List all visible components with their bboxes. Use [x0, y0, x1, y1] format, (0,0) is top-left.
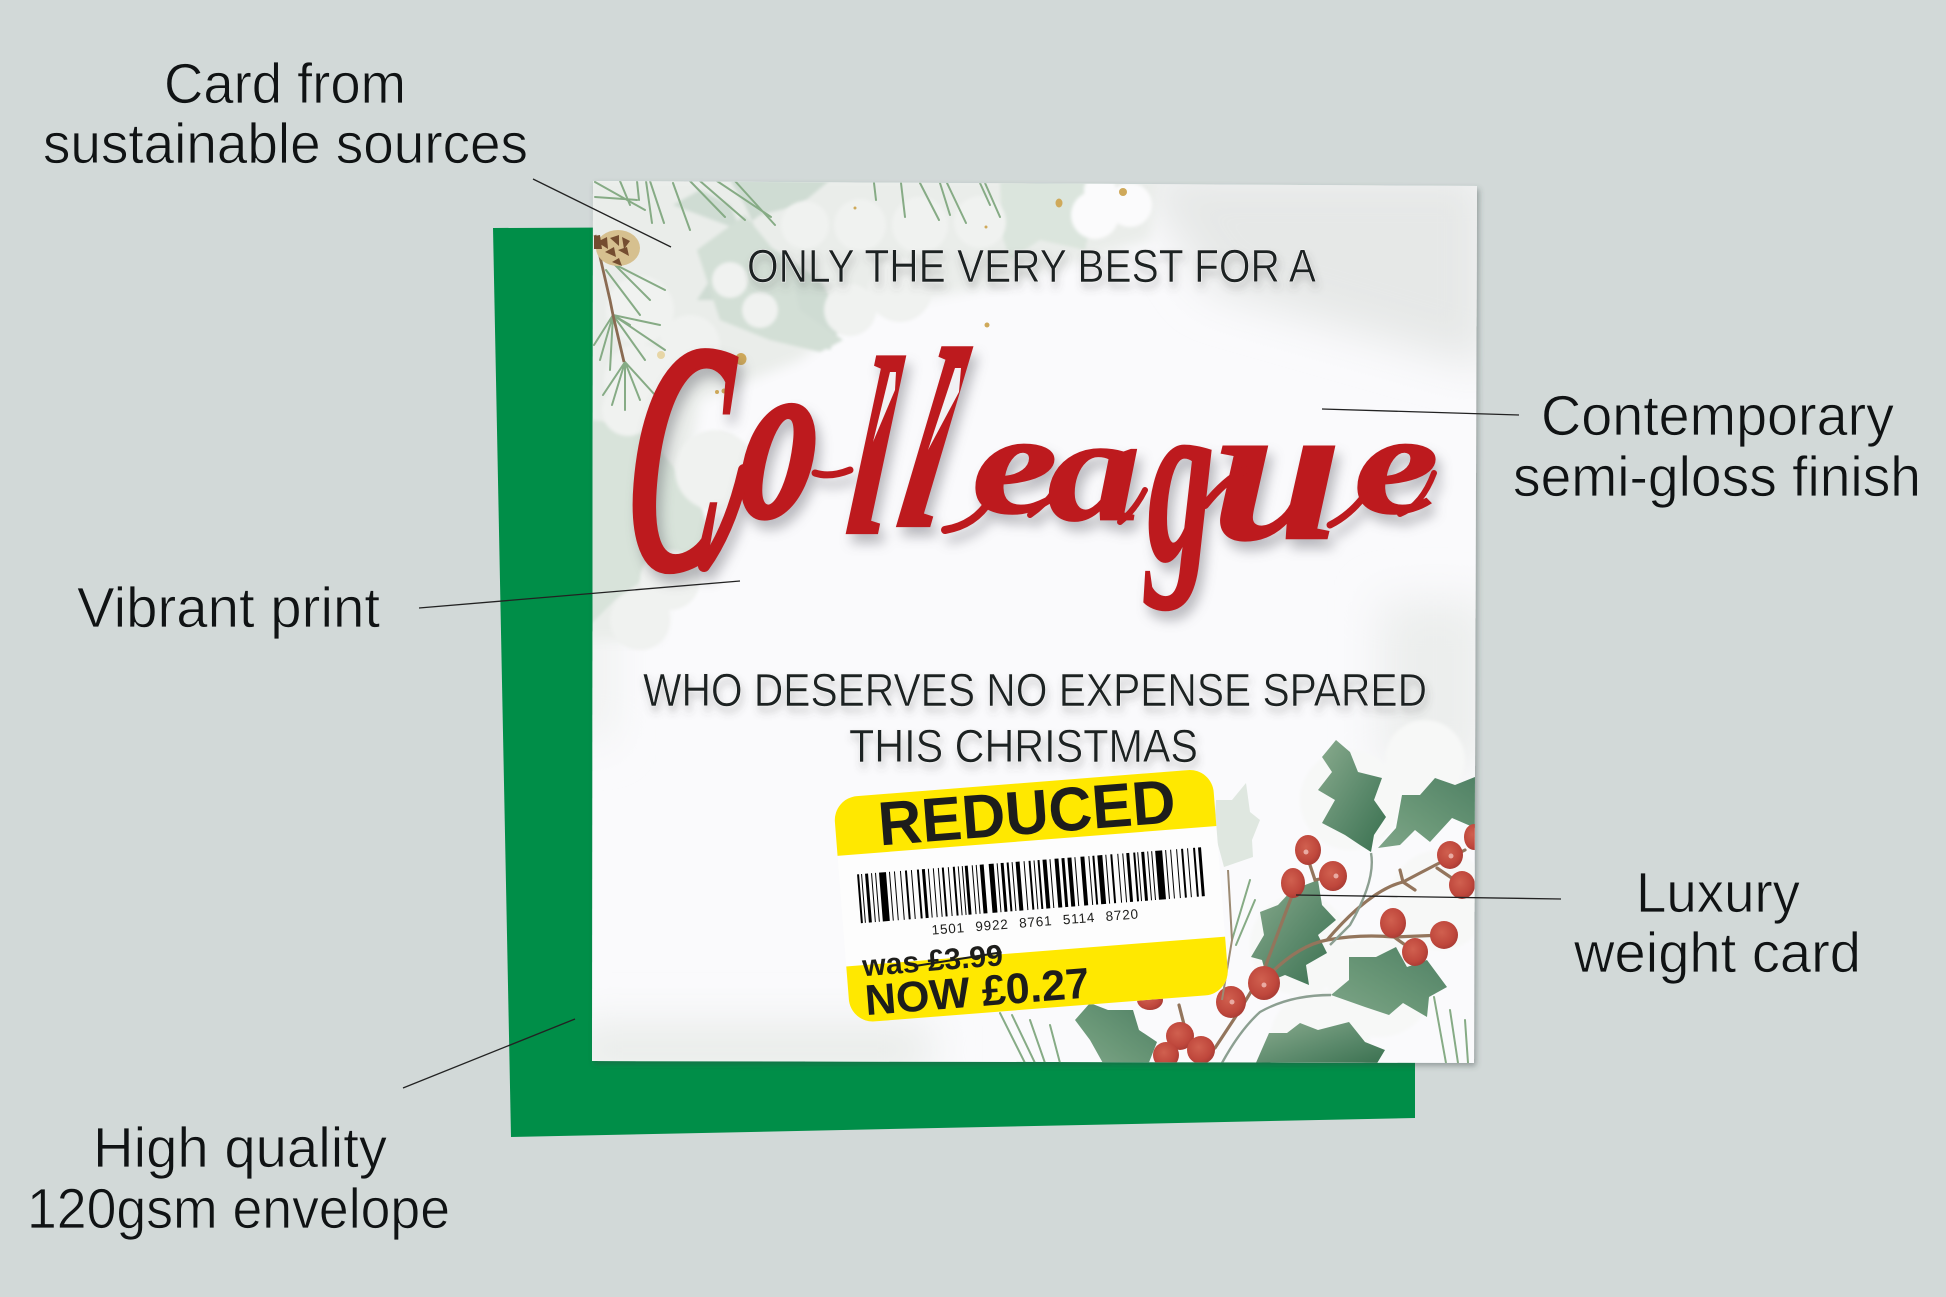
card heading line: ONLY THE VERY BEST FOR A: [747, 240, 1316, 292]
label: high quality 120gsm envelope: 120gsm envelope: [27, 1177, 450, 1241]
card message line two: THIS CHRISTMAS: [849, 720, 1198, 772]
colleague script heading: a: [1045, 386, 1143, 552]
reduced price sticker: [831, 764, 1232, 1026]
colleague script heading: u: [1211, 360, 1343, 582]
label: high quality 120gsm envelope: High quality: [93, 1116, 387, 1180]
leader line: vibrant print: [419, 581, 740, 608]
icon: pine cone: [594, 230, 640, 266]
holly berries: [1137, 824, 1484, 1068]
new price: NOW £0.27: [863, 960, 1091, 1025]
greeting card: [570, 170, 1490, 1090]
white blossom washes: [602, 196, 1006, 650]
holly leaves: [1075, 740, 1480, 1065]
colleague script heading: l: [883, 297, 982, 583]
label: luxury weight card: Luxury: [1636, 861, 1800, 925]
card watercolour background: [570, 170, 1490, 1090]
label: high quality 120gsm envelope: [27, 1116, 450, 1241]
label: contemporary semi-gloss finish: Contemporary: [1541, 384, 1894, 448]
label: card from sustainable sources: Card from: [164, 52, 406, 116]
gold flecks: [657, 188, 1127, 394]
label: contemporary semi-gloss finish: semi-gloss finish: [1513, 445, 1921, 509]
label: card from sustainable sources: sustainable sources: [43, 112, 528, 176]
holly white halos: [1280, 721, 1475, 1063]
holly branches: [1179, 850, 1465, 1048]
leader line: sustainable sources: [533, 179, 671, 247]
leader line: envelope: [403, 1019, 575, 1088]
barcode: [859, 872, 1205, 899]
pale holly leaf: [1214, 783, 1260, 867]
pine needles: [594, 181, 1468, 1063]
leader line: luxury weight card: [1296, 895, 1561, 899]
colleague script heading: l: [838, 307, 911, 589]
old price: was £3.99: [860, 939, 1004, 983]
label: vibrant print: Vibrant print: [77, 576, 380, 640]
colleague script heading: C: [616, 275, 743, 642]
label: card from sustainable sources: [43, 52, 528, 176]
leader line: semi-gloss finish: [1322, 409, 1519, 415]
green envelope: [493, 226, 1415, 1137]
barcode digits: 1501 9922 8761 5114 8720: [931, 906, 1139, 938]
label: luxury weight card: weight card: [1573, 921, 1861, 985]
colleague script heading: e: [967, 384, 1062, 545]
label: contemporary semi-gloss finish: [1513, 384, 1921, 509]
card message line one: WHO DESERVES NO EXPENSE SPARED: [643, 664, 1427, 716]
sage wash patches: [673, 180, 843, 350]
sticker heading: REDUCED: [876, 767, 1178, 859]
label: luxury weight card: [1573, 861, 1861, 985]
colleague script heading: g: [1146, 346, 1216, 612]
colleague script heading: o: [729, 307, 836, 568]
colleague script heading: e: [1349, 384, 1443, 545]
